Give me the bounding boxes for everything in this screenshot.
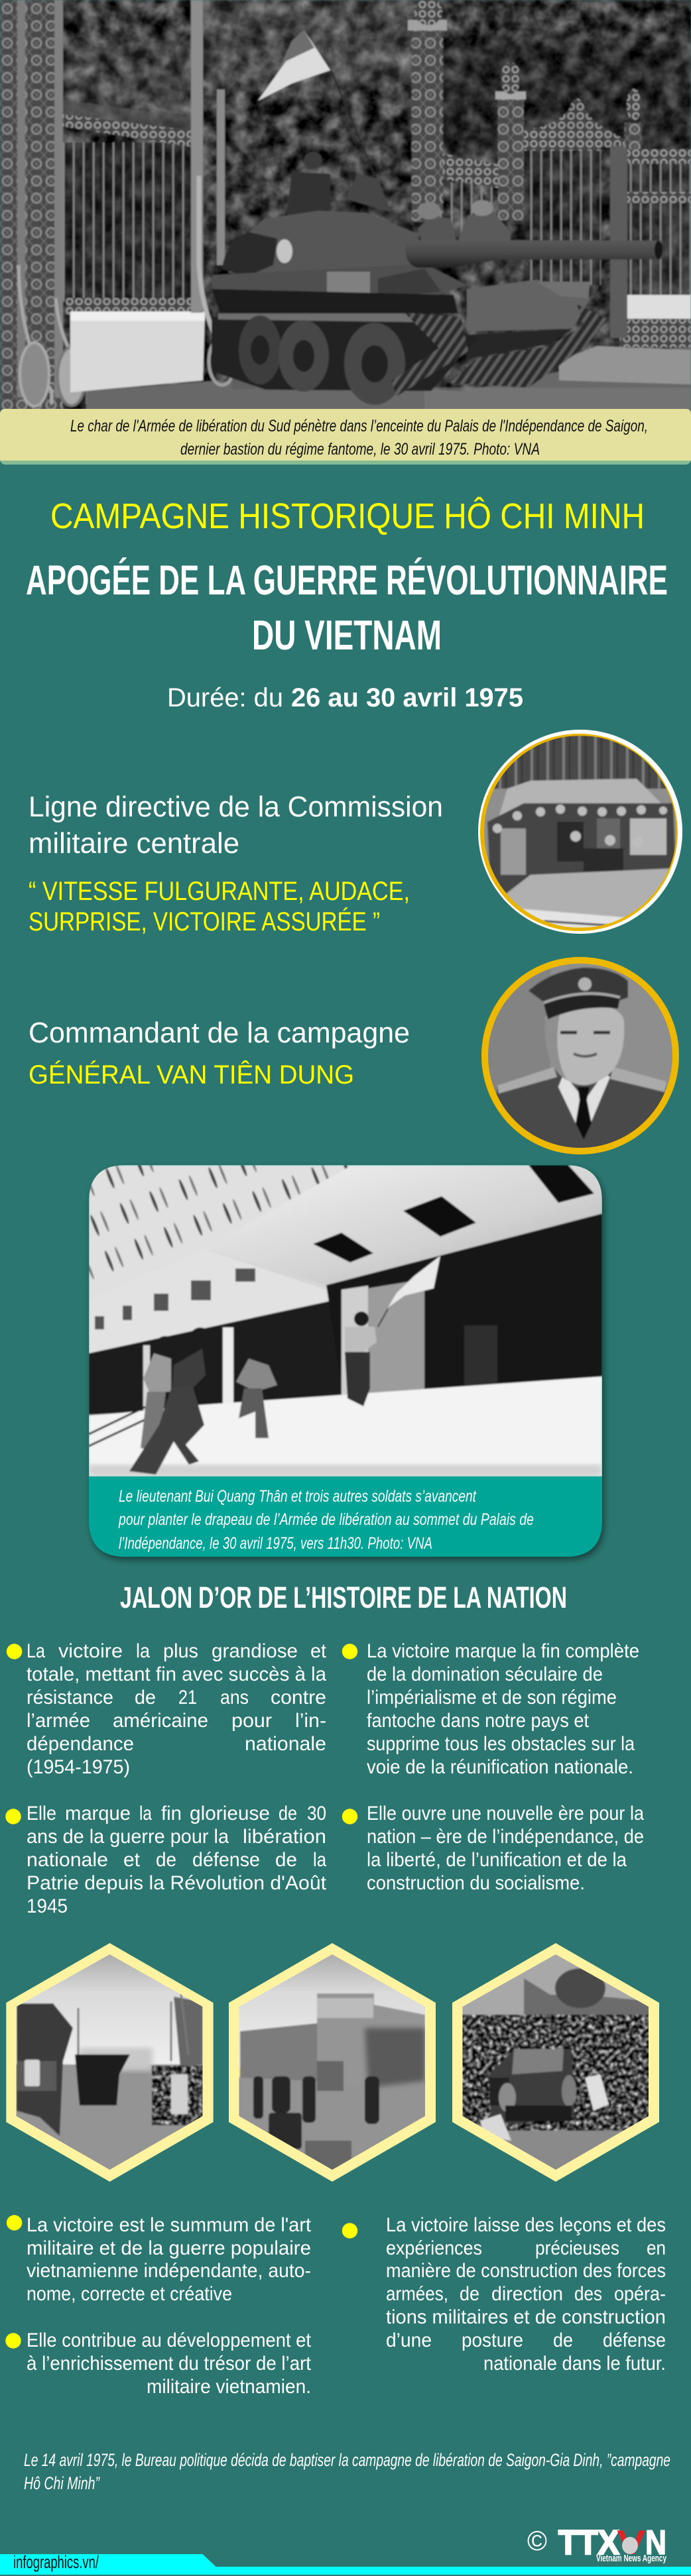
bullet: summit of military art: La victoire est le summum de l'art <box>27 2214 312 2236</box>
soldiers on and behind the tank <box>286 152 511 252</box>
bullet: enrichment of military art: à l’enrichissement du trésor de l’art <box>27 2353 312 2375</box>
overhang with skylights <box>203 1165 602 1285</box>
bullet: lessons and experience: défense <box>603 2329 666 2351</box>
bullet: grandest victory: plus <box>163 1640 198 1662</box>
bullet: grandest victory: l’in- <box>295 1710 326 1732</box>
bullet: grandest victory: pour <box>231 1710 272 1732</box>
trees background <box>62 0 691 409</box>
map table <box>506 867 670 917</box>
bullet: grandest victory: contre <box>271 1687 326 1708</box>
gate poles <box>191 0 203 313</box>
bullet: enrichment of military art: Elle contribue au développement et <box>27 2329 312 2351</box>
text: campaign commander: GÉNÉRAL VAN TIÊN DUNG <box>29 1060 354 1090</box>
bullet: lessons and experience <box>342 2214 666 2375</box>
bullet: grandest victory: la <box>136 1640 150 1662</box>
bullet: glorious end of 30 years of war: 1945 <box>27 1895 68 1917</box>
bullet: end of imperialist domination: l’impérialisme et de son régime <box>367 1687 617 1708</box>
main heading <box>26 557 668 659</box>
bullet: grandest victory: 21 <box>178 1687 197 1708</box>
bullet: glorious end of 30 years of war: Elle <box>27 1803 56 1824</box>
main heading: DU VIETNAM <box>252 612 442 659</box>
face <box>545 1004 624 1086</box>
bullet: new era for the nation: nation – ère de l’indépendance, de <box>367 1826 644 1848</box>
footnote: Hô Chi Minh” <box>24 2473 100 2493</box>
bullet: lessons and experience: armées, <box>386 2283 448 2305</box>
logo: TTXVN Vietnam News Agency: N <box>645 2524 666 2562</box>
photo: palace facade <box>89 1165 602 1477</box>
turret <box>225 211 418 274</box>
title block <box>26 496 668 712</box>
bullet: lessons and experience: précieuses <box>535 2237 619 2259</box>
wing and windows <box>89 1249 340 1353</box>
bullet: end of imperialist domination: La victoire marque la fin complète <box>367 1640 639 1662</box>
left truck <box>17 2003 73 2136</box>
bullet: enrichment of military art: militaire vietnamien. <box>147 2376 311 2398</box>
bullet: grandest victory: totale, mettant fin avec succès à la <box>27 1663 326 1685</box>
bullet: glorious end of 30 years of war: libération <box>243 1826 326 1848</box>
text: central military commission guideline <box>29 791 443 936</box>
text: central military commission guideline: militaire centrale <box>29 827 239 860</box>
logo: TTXVN Vietnam News Agency: TTX <box>558 2524 619 2562</box>
bullet: glorious end of 30 years of war: de <box>275 1849 297 1871</box>
bullet: grandest victory <box>7 1640 327 1778</box>
duration <box>167 683 523 712</box>
top photo caption <box>0 409 691 465</box>
bullet: lessons and experience: tions militaires et de construction <box>386 2306 666 2328</box>
gun barrel <box>405 240 661 268</box>
bullet: grandest victory: (1954-1975) <box>27 1756 130 1778</box>
group of officers <box>487 803 676 895</box>
circular portrait: General Van Tien Dung <box>481 957 679 1154</box>
text: campaign commander: Commandant de la campagne <box>29 1017 410 1049</box>
bullet: grandest victory: victoire <box>58 1640 123 1662</box>
barrel <box>269 2113 302 2149</box>
wheels and track <box>212 317 477 391</box>
bullet: end of imperialist domination: supprime tous les obstacles sur la <box>367 1733 635 1755</box>
bullet: lessons and experience: de <box>460 2283 479 2305</box>
bullet: new era for the nation: Elle ouvre une nouvelle ère pour la <box>367 1803 644 1824</box>
bullet: grandest victory: grandiose <box>212 1640 298 1662</box>
ground <box>86 345 691 418</box>
white wall block <box>70 311 205 392</box>
white steps <box>89 1376 602 1477</box>
bullet: glorious end of 30 years of war <box>5 1803 327 1917</box>
bullet: glorious end of 30 years of war: défense <box>192 1849 260 1871</box>
duration: 26 au 30 avril 1975 <box>291 683 523 712</box>
bullet: lessons and experience: en <box>647 2237 666 2259</box>
bullet: end of imperialist domination: fantoche dans notre pays et <box>367 1710 590 1732</box>
bullet: lessons and experience: de <box>553 2329 573 2351</box>
bullet: summit of military art: nome, correcte et créative <box>27 2283 232 2305</box>
bullet: enrichment of military art <box>5 2329 312 2398</box>
flag carrier <box>345 1256 440 1406</box>
hull side <box>212 289 458 313</box>
uniform <box>496 1068 667 1148</box>
bullet: new era for the nation <box>342 1803 644 1894</box>
circular photo: commission meeting <box>478 730 682 934</box>
bullet: lessons and experience: des <box>574 2283 602 2305</box>
caption bar: pour planter le drapeau de l’Armée de libération au sommet du Palais de <box>118 1510 534 1529</box>
crowd on right <box>152 2066 203 2125</box>
bullet: glorious end of 30 years of war: glorieuse <box>190 1803 270 1824</box>
bullet: grandest victory: résistance <box>27 1687 113 1708</box>
footer band with site name <box>0 2552 691 2575</box>
logo: TTXVN Vietnam News Agency: V <box>617 2524 646 2562</box>
dark ground floor <box>89 1299 344 1415</box>
truck <box>489 2049 576 2124</box>
bullet: grandest victory: et <box>310 1640 327 1662</box>
bystanders in white <box>480 2114 511 2141</box>
bullet: grandest victory: ans <box>220 1687 249 1708</box>
bullet: end of imperialist domination <box>342 1640 639 1778</box>
two foreground soldiers <box>129 1327 211 1475</box>
footnote <box>24 2450 670 2493</box>
text: central military commission guideline: “ VITESSE FULGURANTE, AUDACE, <box>29 877 410 906</box>
soldiers <box>253 2076 379 2124</box>
distant truck <box>75 2054 130 2105</box>
text: central military commission guideline: Ligne directive de la Commission <box>29 791 443 823</box>
left gate pillars <box>0 0 88 424</box>
bullet: glorious end of 30 years of war: marque <box>65 1803 131 1824</box>
bullet: end of imperialist domination: voie de la réunification nationale. <box>367 1756 633 1778</box>
bullet: grandest victory: dépendance <box>27 1733 134 1755</box>
bullet: lessons and experience: expériences <box>386 2237 482 2259</box>
hexagon photo: soldiers in a burning street <box>229 1943 436 2182</box>
caption bar <box>89 1477 602 1553</box>
bullet: grandest victory: nationale <box>245 1733 326 1755</box>
military cap <box>528 967 629 1002</box>
bullet: lessons and experience: direction <box>491 2283 563 2305</box>
bullet: summit of military art <box>7 2214 312 2305</box>
panel: photo card of soldiers running toward the palace <box>89 1165 602 1557</box>
bullet: grandest victory: l’armée <box>27 1710 90 1732</box>
bullet: summit of military art: vietnamienne indépendante, auto- <box>27 2260 311 2282</box>
bullet: grandest victory: américaine <box>113 1710 208 1732</box>
running soldier <box>236 1343 277 1438</box>
bullet: glorious end of 30 years of war: de <box>156 1849 176 1871</box>
right gate and fence <box>408 0 691 348</box>
bullet: glorious end of 30 years of war: fin <box>161 1803 182 1824</box>
text: central military commission guideline: SURPRISE, VICTOIRE ASSURÉE ” <box>29 907 380 936</box>
bullet: glorious end of 30 years of war: de <box>279 1803 297 1824</box>
logo: TTXVN Vietnam News Agency: © <box>527 2525 547 2556</box>
bullet: grandest victory: La <box>27 1640 45 1662</box>
bullet: lessons and experience: manière de construction des forces <box>386 2260 666 2282</box>
bullet: lessons and experience: opéra- <box>614 2283 666 2305</box>
footer band with site name: infographics.vn/ <box>13 2552 99 2572</box>
text: campaign commander <box>29 1017 410 1090</box>
buildings <box>240 2023 317 2081</box>
logo: TTXVN Vietnam News Agency <box>527 2524 666 2564</box>
dark portico <box>326 1213 602 1400</box>
top photo caption: dernier bastion du régime fantome, le 30 avril 1975. Photo: VNA <box>180 440 540 459</box>
bullet: end of imperialist domination: de la domination séculaire de <box>367 1663 603 1685</box>
photo: tank entering the Independence Palace gate <box>0 0 691 424</box>
tank <box>212 152 662 405</box>
caption bar: Le lieutenant Bui Quang Thân et trois autres soldats s’avancent <box>119 1487 477 1506</box>
bullet: glorious end of 30 years of war: et <box>123 1849 141 1871</box>
caption bar: l’Indépendance, le 30 avril 1975, vers 11h30. Photo: VNA <box>119 1534 432 1553</box>
bullet: lessons and experience: posture <box>462 2329 523 2351</box>
left fence <box>60 99 197 314</box>
hexagon photo: truck among jubilant crowd <box>452 1943 659 2182</box>
bullet: glorious end of 30 years of war: ans de la guerre pour la <box>27 1826 229 1848</box>
bullet: glorious end of 30 years of war: la <box>313 1849 326 1871</box>
duration: Durée: du <box>167 683 283 712</box>
bullet: glorious end of 30 years of war: Patrie depuis la Révolution d'Août <box>27 1872 327 1894</box>
front plate <box>467 280 590 331</box>
bullet: summit of military art: militaire et de la guerre populaire <box>27 2237 311 2259</box>
bullet: lessons and experience: nationale dans le futur. <box>483 2353 666 2375</box>
flag <box>257 29 375 174</box>
bullet: glorious end of 30 years of war: 30 <box>307 1803 326 1824</box>
bullet: lessons and experience: d’une <box>386 2329 432 2351</box>
hexagon photo: convoy arriving with cheering crowd <box>6 1943 214 2182</box>
bullet: new era for the nation: la liberté, de l’unification et de la <box>367 1849 627 1871</box>
bullet: new era for the nation: construction du socialisme. <box>367 1872 585 1894</box>
deck <box>212 264 467 295</box>
bullet: glorious end of 30 years of war: la <box>139 1803 152 1824</box>
bullet: grandest victory: de <box>135 1687 156 1708</box>
bullet: glorious end of 30 years of war: nationale <box>27 1849 108 1871</box>
bullet: lessons and experience: La victoire laisse des leçons et des <box>386 2214 666 2236</box>
